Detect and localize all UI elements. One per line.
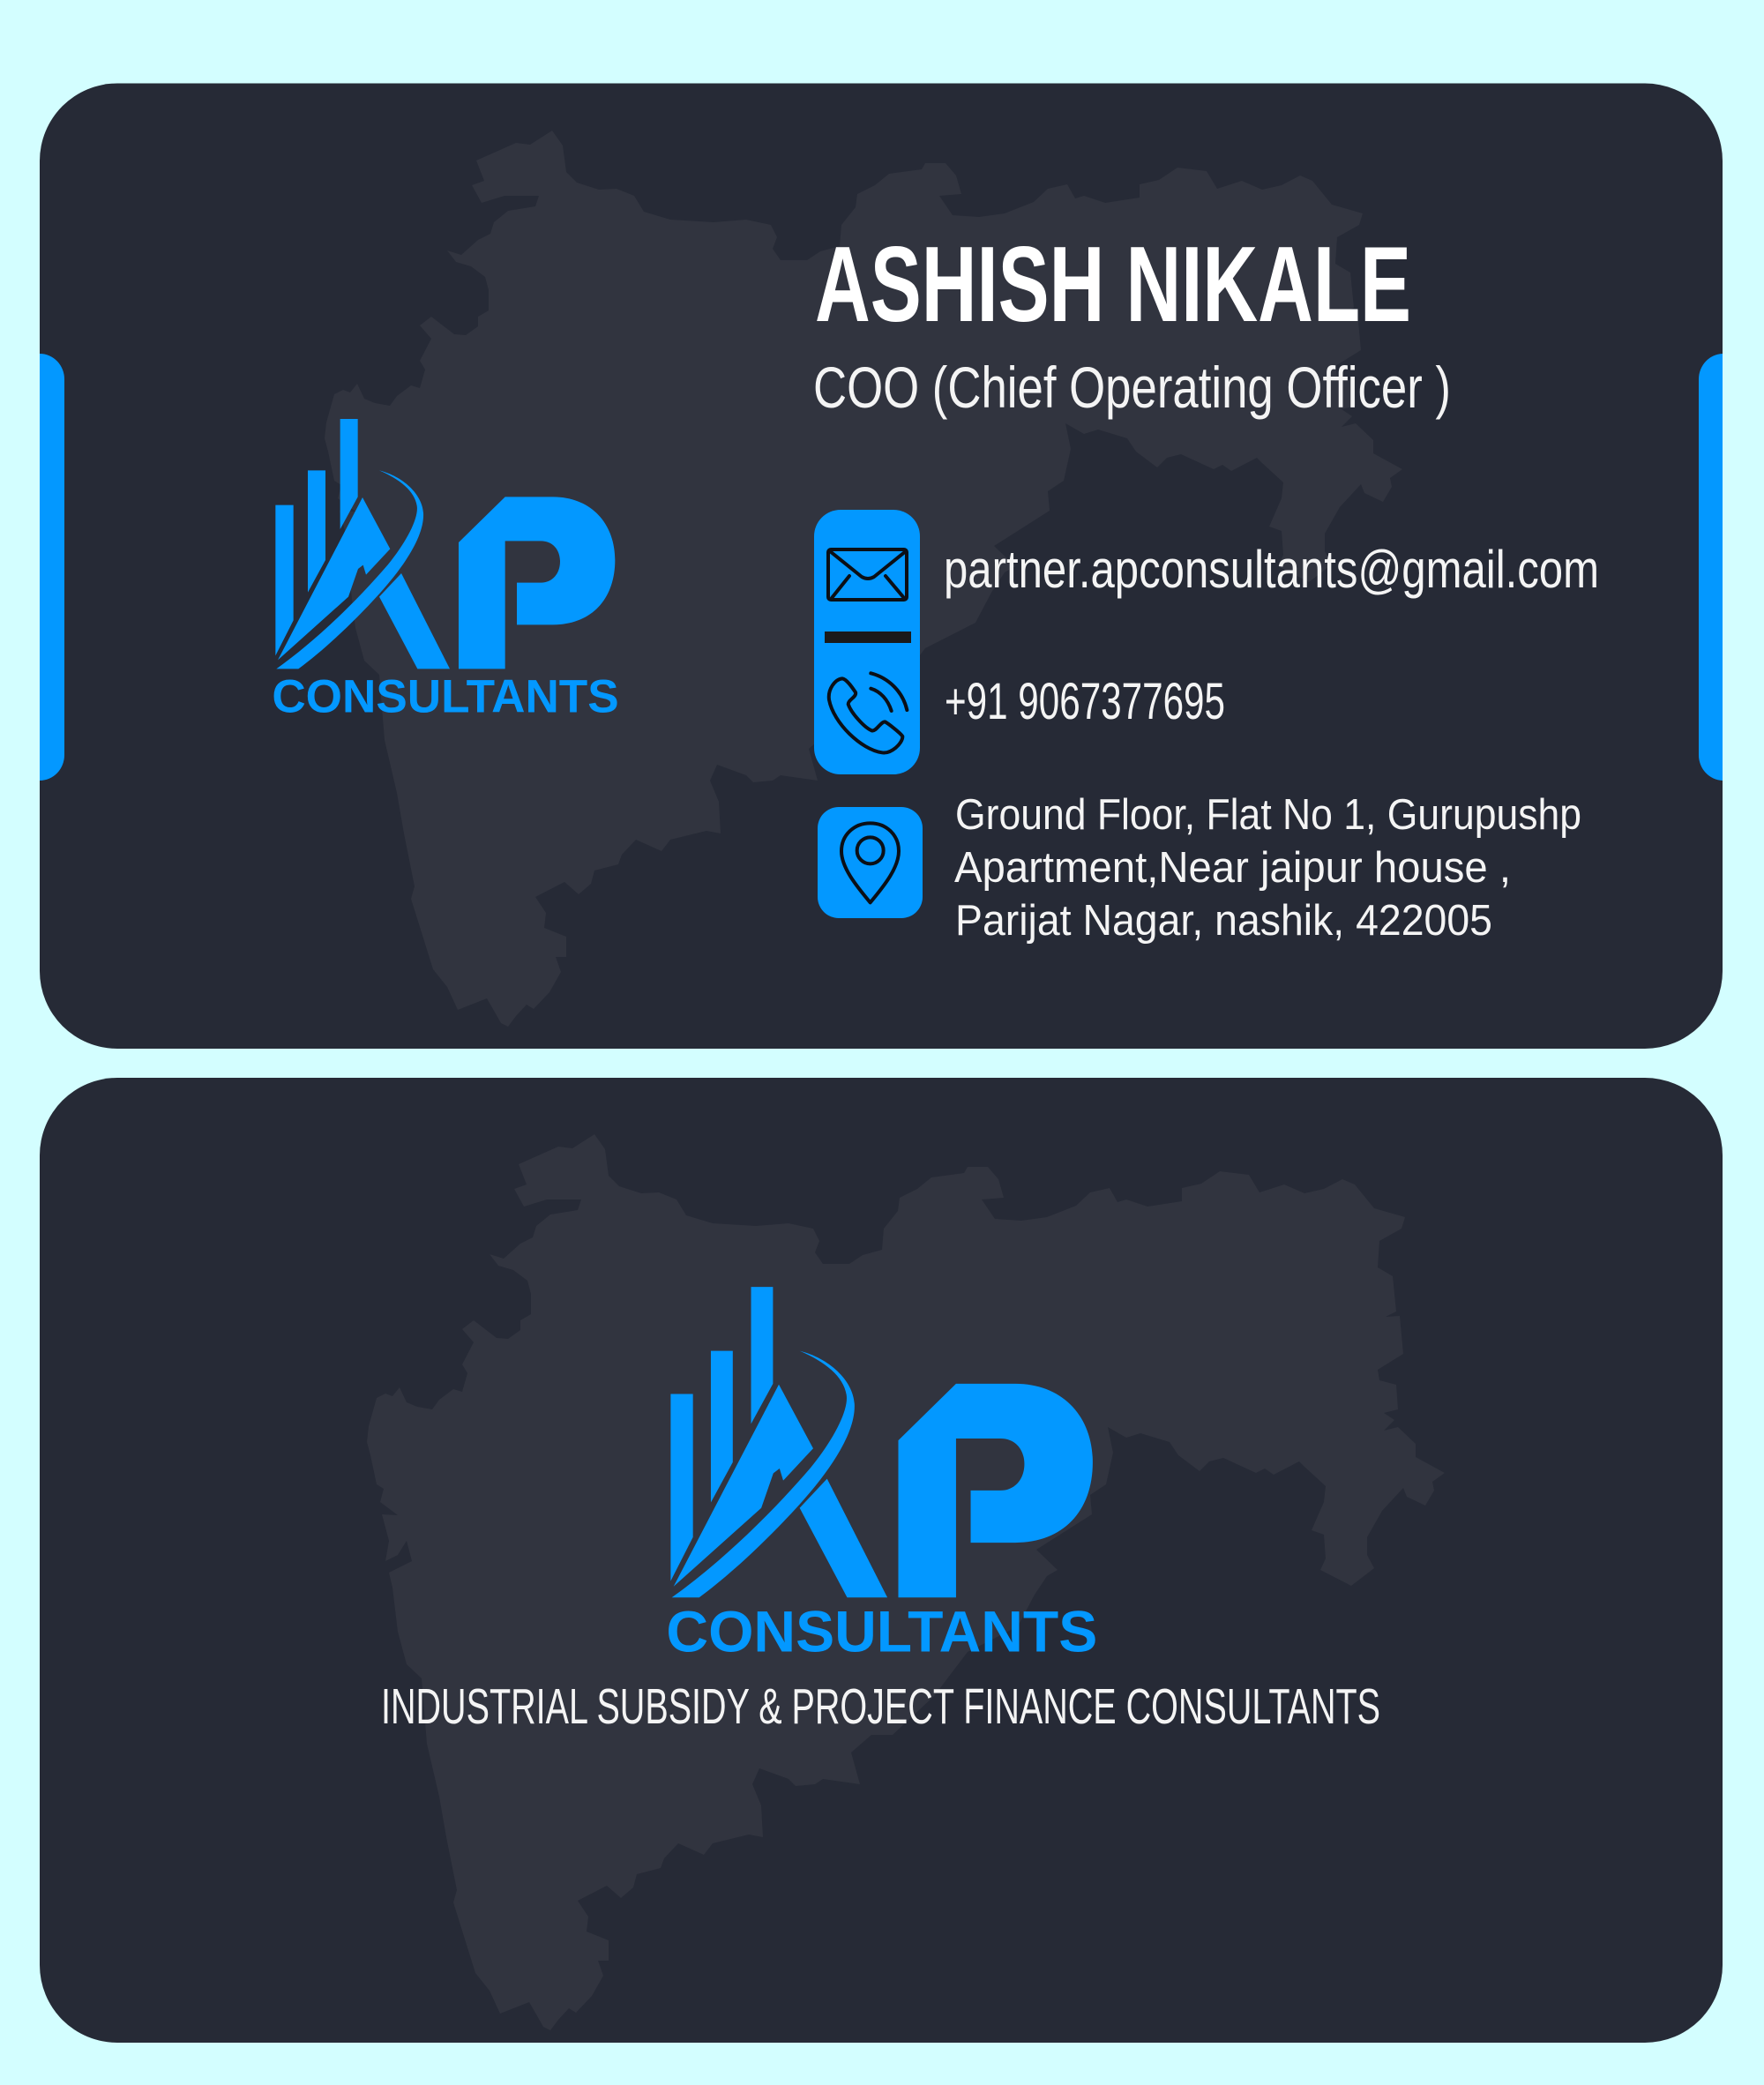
right blue tab	[1699, 354, 1723, 781]
address	[954, 791, 1581, 945]
icon: phone	[829, 673, 907, 752]
icon: envelope	[828, 549, 907, 600]
back logo: CONSULTANTS	[666, 1600, 1097, 1664]
address: Apartment,Near jaipur house ,	[954, 844, 1511, 892]
back logo	[666, 1287, 1097, 1664]
card background	[40, 83, 1723, 1049]
phone number: +91 9067377695	[945, 673, 1225, 730]
location icon	[818, 807, 923, 918]
panel: back card	[40, 1078, 1723, 2043]
logo	[272, 419, 619, 723]
email: partner.apconsultants@gmail.com	[944, 540, 1599, 599]
name: ASHISH NIKALE	[815, 224, 1411, 344]
address: Parijat Nagar, nashik, 422005	[955, 897, 1492, 945]
map watermark	[325, 131, 1402, 1027]
address: Ground Floor, Flat No 1, Gurupushp	[955, 791, 1581, 839]
left blue tab	[40, 354, 64, 781]
contact icon panel	[814, 510, 920, 774]
logo: CONSULTANTS	[272, 671, 619, 723]
back map watermark	[367, 1134, 1445, 2030]
back card background	[40, 1078, 1723, 2043]
job title: COO (Chief Operating Officer )	[813, 355, 1451, 420]
panel: front card	[40, 83, 1723, 1049]
